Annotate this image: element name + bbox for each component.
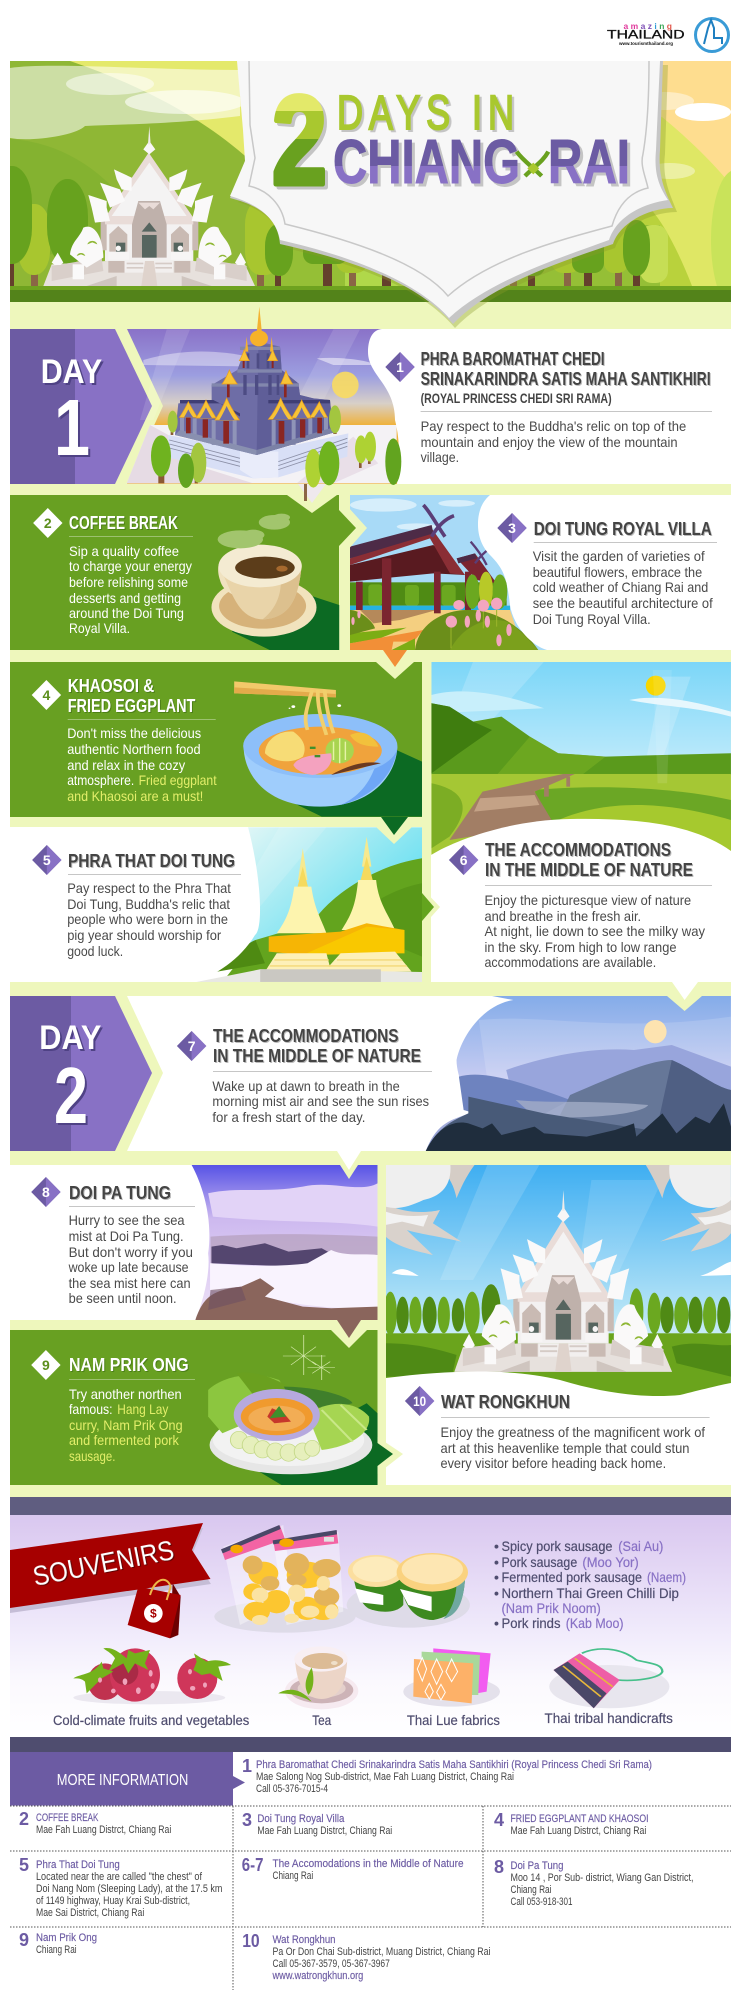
body text: doi pa tung: the sea mist here can [69,1275,191,1291]
number badge 1: 1 [396,359,404,375]
panel: coffee break [10,495,339,650]
info entry 3: Mae Fah Luang Distrct, Chiang Rai [257,1825,392,1837]
info entry 2: COFFEE BREAK [36,1812,99,1824]
number badge 4: 4 [43,687,51,703]
souvenir list: Spicy pork sausage [502,1538,613,1554]
illustration: royal villa pavilion [350,495,547,650]
arrow: day 1 to coffee break [287,441,339,513]
body text: stop 7 [212,1078,429,1125]
arrow: doi pa tung to nam prik ong [331,1320,367,1348]
body text: accommodations: At night, lie down to see the milky way [484,923,705,939]
foreground trees over arrow [305,441,339,488]
arrow: day 2 to doi pa tung [331,1151,367,1179]
number badge 8 [31,1177,61,1207]
sparkles [283,1335,335,1380]
info entry 10: Pa Or Don Chai Sub-district, Muang District, Chiang Rai [272,1946,490,1958]
arrow: villa to khaosoi [376,650,414,679]
body text: accommodations: and breathe in the fresh air. [484,908,641,924]
logos [607,18,728,52]
info entry 2: 2 [19,1809,29,1829]
body text: nam prik ong [69,1386,183,1464]
logo: round seal [696,18,728,52]
info entry 3: Doi Tung Royal Villa [257,1813,345,1825]
icon: shopping bag: $ [150,1607,157,1621]
day 1 ribbon [10,329,152,484]
body text: nam prik ong: Try another northen [69,1386,182,1402]
body text: phra that doi tung: pig year should worship for [67,927,222,943]
info entry 9: 9 [19,1930,29,1950]
logo: Amazing Thailand [607,21,685,46]
info entry 6-7: Chiang Rai [272,1870,313,1882]
info entry 4: FRIED EGGPLANT AND KHAOSOI [510,1813,648,1825]
info entry 6-7: 6-7 [242,1855,264,1875]
day 1 ribbon: 1 [54,383,90,472]
illustration: nam prik ong plate [208,1335,378,1485]
souvenir captions: Cold-climate fruits and vegetables [53,1712,249,1728]
panel: phra that doi tung [10,827,422,982]
body text: khaosoi: and relax in the cozy [67,757,185,773]
body text: doi tung royal villa: Doi Tung Royal Villa. [533,611,651,627]
body text: stop 7: morning mist air and see the sun rises [212,1093,429,1109]
body text: doi pa tung: mist at Doi Pa Tung. [69,1228,184,1244]
souvenir list: Northern Thai Green Chilli Dip [502,1585,679,1601]
souvenir captions: Tea [312,1712,331,1728]
arrow: nam prik ong to wat rongkhun [378,1437,403,1474]
title: 2 Days in Chiang Rai: RAI [548,128,630,197]
info entry 5: Doi Nang Nom (Sleeping Lady), at the 17.5 km [36,1883,222,1895]
info entry 1: 1 [242,1756,252,1776]
number badge 9 [31,1350,61,1380]
souvenir list: • [494,1615,499,1631]
arrow: khaosoi to phra that [376,817,412,844]
body text: accommodations [484,892,705,970]
info card 10 [386,1372,731,1485]
body text: nam prik ong: sausage. [69,1448,115,1464]
body text: coffee break: Sip a quality coffee [69,543,179,559]
body text: doi tung royal villa: see the beautiful architecture of [533,595,713,611]
info card 5 [10,827,260,982]
souvenir list: Fermented pork sausage [502,1569,642,1585]
info entry 4: 4 [494,1810,504,1830]
day 1 ribbon: DAY [41,353,102,391]
info entry 3 [242,1810,392,1837]
souvenir list: Pork sausage [502,1554,577,1570]
illustration: strawberries [73,1648,231,1704]
body text: khaosoi: atmosphere. [67,772,134,788]
info entry 2: Mae Fah Luang Distrct, Chiang Rai [36,1824,171,1836]
info entry 5 [19,1855,222,1919]
body text: khaosoi [67,725,217,804]
illustration: thai tribal bag [549,1649,669,1708]
info entry 8: Chiang Rai [510,1884,552,1896]
souvenir list: (Kab Moo) [566,1615,624,1631]
info entry 5: 5 [19,1855,29,1875]
body text: doi pa tung: be seen until noon. [69,1290,177,1306]
info entry 3: 3 [242,1810,252,1830]
number badge 7 [177,1031,206,1061]
body text: phra that doi tung: people who were born in the [67,911,228,927]
info entry 9 [19,1930,97,1956]
body text: accommodations: accommodations are available. [484,954,656,970]
banner: souvenirs: SOUVENIRS [30,1534,177,1592]
title: 2 Days in Chiang Rai: CHIANG [333,128,520,197]
souvenir captions: Thai Lue fabrics [407,1712,500,1728]
info entry 8: Moo 14 , Por Sub- district, Wiang Gan District, [510,1872,694,1884]
panel: nam prik ong [10,1330,378,1485]
souvenir list: (Nam Prik Noom) [502,1600,601,1616]
number badge 1 [385,352,415,382]
heading: stop 7: THE ACCOMMODATIONS [213,1025,398,1046]
panel: day 1 [10,307,731,488]
info entry 5: Mae Sai District, Chiang Rai [36,1907,144,1919]
more information header [10,1752,245,1806]
number badge 5: 5 [43,852,51,868]
info entry 10 [242,1931,490,1982]
body text: stop 7: for a fresh start of the day. [212,1109,365,1125]
info entry 4: Mae Fah Luang Distrct, Chiang Rai [510,1825,646,1837]
illustration: sea of mist [192,1165,378,1320]
body text: phra that doi tung: good luck. [67,943,123,959]
illustration: coffee cup [211,514,339,650]
souvenir captions: Thai tribal handicrafts [544,1710,673,1726]
arrow: accommodations to day 2 [667,982,702,1011]
info entry 5: of 1149 highway, Huay Krai Sub-district, [36,1895,190,1907]
heading: wat rongkhun: WAT RONGKHUN [441,1391,570,1412]
title: 2 Days in Chiang Rai [272,70,630,211]
info entry 10: Wat Rongkhun [272,1934,336,1946]
info entry 9: Nam Prik Ong [36,1932,97,1944]
number badge 3: 3 [508,520,516,536]
info entry 6-7 [242,1855,464,1882]
info card 6 [431,819,731,982]
title: 2 Days in Chiang Rai: DAYS IN [337,86,514,139]
body text: coffee break: desserts and getting [69,590,181,606]
heading: coffee break: COFFEE BREAK [69,512,178,533]
illustration: khaosoi bowl [234,681,422,817]
souvenir list: • [494,1554,499,1570]
panel: souvenirs [10,1497,731,1737]
body text: khaosoi: Don't miss the delicious [67,725,201,741]
body text: khaosoi: authentic Northern food [67,741,201,757]
day 2 ribbon [10,996,152,1151]
body text: wat rongkhun [440,1424,705,1471]
heading: khaosoi: FRIED EGGPLANT [68,695,196,716]
body text: stop 1 [421,418,686,465]
body text: accommodations: Enjoy the picturesque view of nature [484,892,691,908]
body text: stop 1: village. [421,449,459,465]
number badge 3 [497,513,527,543]
info entry 5: Phra That Doi Tung [36,1859,120,1871]
number badge 10 [405,1386,434,1416]
day 2 ribbon: DAY [39,1019,102,1057]
icon: shopping bag [128,1580,181,1638]
number badge 6: 6 [460,852,468,868]
heading: accommodations: IN THE MIDDLE OF NATURE [485,859,693,880]
heading: accommodations [485,839,693,880]
body text: phra that doi tung: Pay respect to the Phra That [67,880,231,896]
souvenir list: • [494,1569,499,1585]
souvenir captions [53,1710,673,1728]
heading: khaosoi: KHAOSOI & [68,675,154,696]
number badge 4 [32,680,61,710]
number badge 2: 2 [44,515,52,531]
info card 7 [127,996,731,1151]
info card 3 [478,495,731,650]
illustration: twin stupas [196,827,422,982]
heading: doi pa tung: DOI PA TUNG [69,1182,171,1203]
hero scenery [0,61,741,310]
heading: stop 1 [421,348,711,406]
body text: doi pa tung: Hurry to see the sea [69,1212,185,1228]
temple illustration [43,126,255,286]
title: 2 Days in Chiang Rai: 2 [272,70,327,211]
body text: accommodations: in the sky. From high to low range [484,939,677,955]
illustration: thai lue fabrics [403,1648,500,1707]
souvenir list: (Sai Au) [618,1538,663,1554]
souvenir list: • [494,1585,499,1601]
number badge 6 [449,845,478,875]
info entry 5: Located near the are called "the chest" of [36,1871,203,1883]
body text: phra that doi tung [67,880,231,959]
body text: wat rongkhun: Enjoy the greatness of the magnificent work of [440,1424,705,1440]
body text: coffee break: to charge your energy [69,558,192,574]
panel: wat rongkhun [384,1165,731,1485]
info entry 10: www.watrongkhun.org [272,1970,363,1982]
info entry 1: Mae Salong Nog Sub-district, Mae Fah Luang District, Chaing Rai [256,1771,514,1783]
info entry 1 [242,1756,652,1795]
info entry 1: Call 05-376-7015-4 [256,1783,328,1795]
info entry 8: Doi Pa Tung [510,1860,564,1872]
number badge 5 [32,845,62,875]
heading: stop 1: (ROYAL PRINCESS CHEDI SRI RAMA) [421,390,612,406]
number badge 2 [33,508,62,538]
arrow: coffee break to royal villa [339,497,367,560]
souvenir list: Pork rinds [502,1615,560,1631]
hero banner [0,61,741,328]
panel: doi pa tung [10,1165,378,1320]
info entry 8: Call 053-918-301 [510,1896,572,1908]
body text: doi tung royal villa: beautiful flowers, embrace the [533,564,702,580]
logo: Amazing Thailand: THAILAND [607,29,685,41]
heading: khaosoi [68,675,196,716]
body text: doi pa tung: But don't worry if you [69,1244,193,1260]
corner ornaments [386,1165,731,1276]
number badge 7: 7 [188,1038,196,1054]
body text: stop 1: mountain and enjoy the view of the mountain [421,434,678,450]
banner: souvenirs [10,1523,211,1613]
body text: coffee break: Royal Villa. [69,620,130,636]
body text: coffee break [69,543,192,636]
panel: khaosoi and fried eggplant [10,662,422,817]
body text: doi tung royal villa: cold weather of Chiang Rai and [533,579,708,595]
info entry 4 [494,1810,648,1837]
heading: stop 7: IN THE MIDDLE OF NATURE [213,1045,421,1066]
body text: coffee break: around the Doi Tung [69,605,184,621]
body text: khaosoi: and Khaosoi are a must! [67,788,203,804]
illustration: mountain landscape [431,662,731,861]
logo: Amazing Thailand: www.tourismthailand.org [618,41,673,46]
icon: crossed krabi swords [517,152,548,176]
info entry 6-7: The Accomodations in the Middle of Nature [272,1858,464,1870]
body text: stop 7: Wake up at dawn to breath in the [212,1078,400,1094]
illustration: cup of tea [278,1646,358,1709]
info entry 9: Chiang Rai [36,1944,77,1956]
body text: wat rongkhun: every visitor before heading back home. [440,1455,666,1471]
body text: khaosoi: Fried eggplant [139,772,217,788]
info entry 10: Call 05-367-3579, 05-367-3967 [272,1958,390,1970]
info entry 8: 8 [494,1857,504,1877]
info entry 8 [494,1857,694,1908]
body text: wat rongkhun: art at this heavenlike temple that could stun [440,1440,690,1456]
body text: nam prik ong: curry, Nam Prik Ong [69,1417,183,1433]
info entry 10: 10 [242,1931,260,1951]
souvenir list: (Moo Yor) [582,1554,639,1570]
number badge 10: 10 [413,1393,426,1409]
trees [158,430,371,483]
number badge 9: 9 [42,1357,50,1373]
souvenir list: (Naem) [647,1569,686,1585]
body text: doi tung royal villa: Visit the garden of varieties of [533,548,705,564]
souvenir list: • [494,1538,499,1554]
illustration: white temple [384,1165,731,1400]
body text: doi tung royal villa [533,548,713,627]
body text: nam prik ong: famous: [69,1401,113,1417]
shield title plate [230,61,677,328]
illustration: misty mountains at dawn [426,996,731,1151]
panel: more information [10,1737,731,1990]
heading: accommodations: THE ACCOMMODATIONS [485,839,671,860]
panel: the accommodations [431,662,731,982]
number badge 8: 8 [42,1184,50,1200]
body text: stop 1: Pay respect to the Buddha's relic on top of the [421,418,686,434]
info entry 1: Phra Baromathat Chedi Srinakarindra Satis Maha Santikhiri (Royal Princess Chedi Sri Rama) [256,1759,652,1771]
foreground trees: day 1 [385,438,401,485]
body text: phra that doi tung: Doi Tung, Buddha's relic that [67,896,230,912]
illustration: chilli dip jars [347,1553,470,1628]
panel: doi tung royal villa [350,495,731,650]
body text: nam prik ong: and fermented pork [69,1432,180,1448]
illustration: snack bags [214,1525,356,1633]
pale green gutters [10,302,731,1497]
body text: doi pa tung [68,1212,193,1306]
steam [218,514,290,548]
day 2 ribbon: 2 [54,1051,88,1140]
more information header: MORE INFORMATION [57,1772,188,1789]
body text: nam prik ong: Hang Lay [117,1401,168,1417]
heading: stop 1: PHRA BAROMATHAT CHEDI [421,348,605,369]
logo: Amazing Thailand: am az i n g [624,21,672,31]
info card 1 [368,329,731,484]
arrow: phra that to accommodations [422,888,440,927]
heading: nam prik ong: NAM PRIK ONG [69,1354,189,1375]
panel: day 2 [10,996,731,1151]
illustration: royal princess chedi [127,307,400,488]
body text: coffee break: before relishing some [69,574,188,590]
heading: stop 7 [213,1025,421,1066]
body text: doi pa tung: woke up late because [68,1259,189,1275]
souvenir list [494,1538,686,1631]
heading: phra that doi tung: PHRA THAT DOI TUNG [68,850,235,871]
info entry 2 [19,1809,171,1836]
